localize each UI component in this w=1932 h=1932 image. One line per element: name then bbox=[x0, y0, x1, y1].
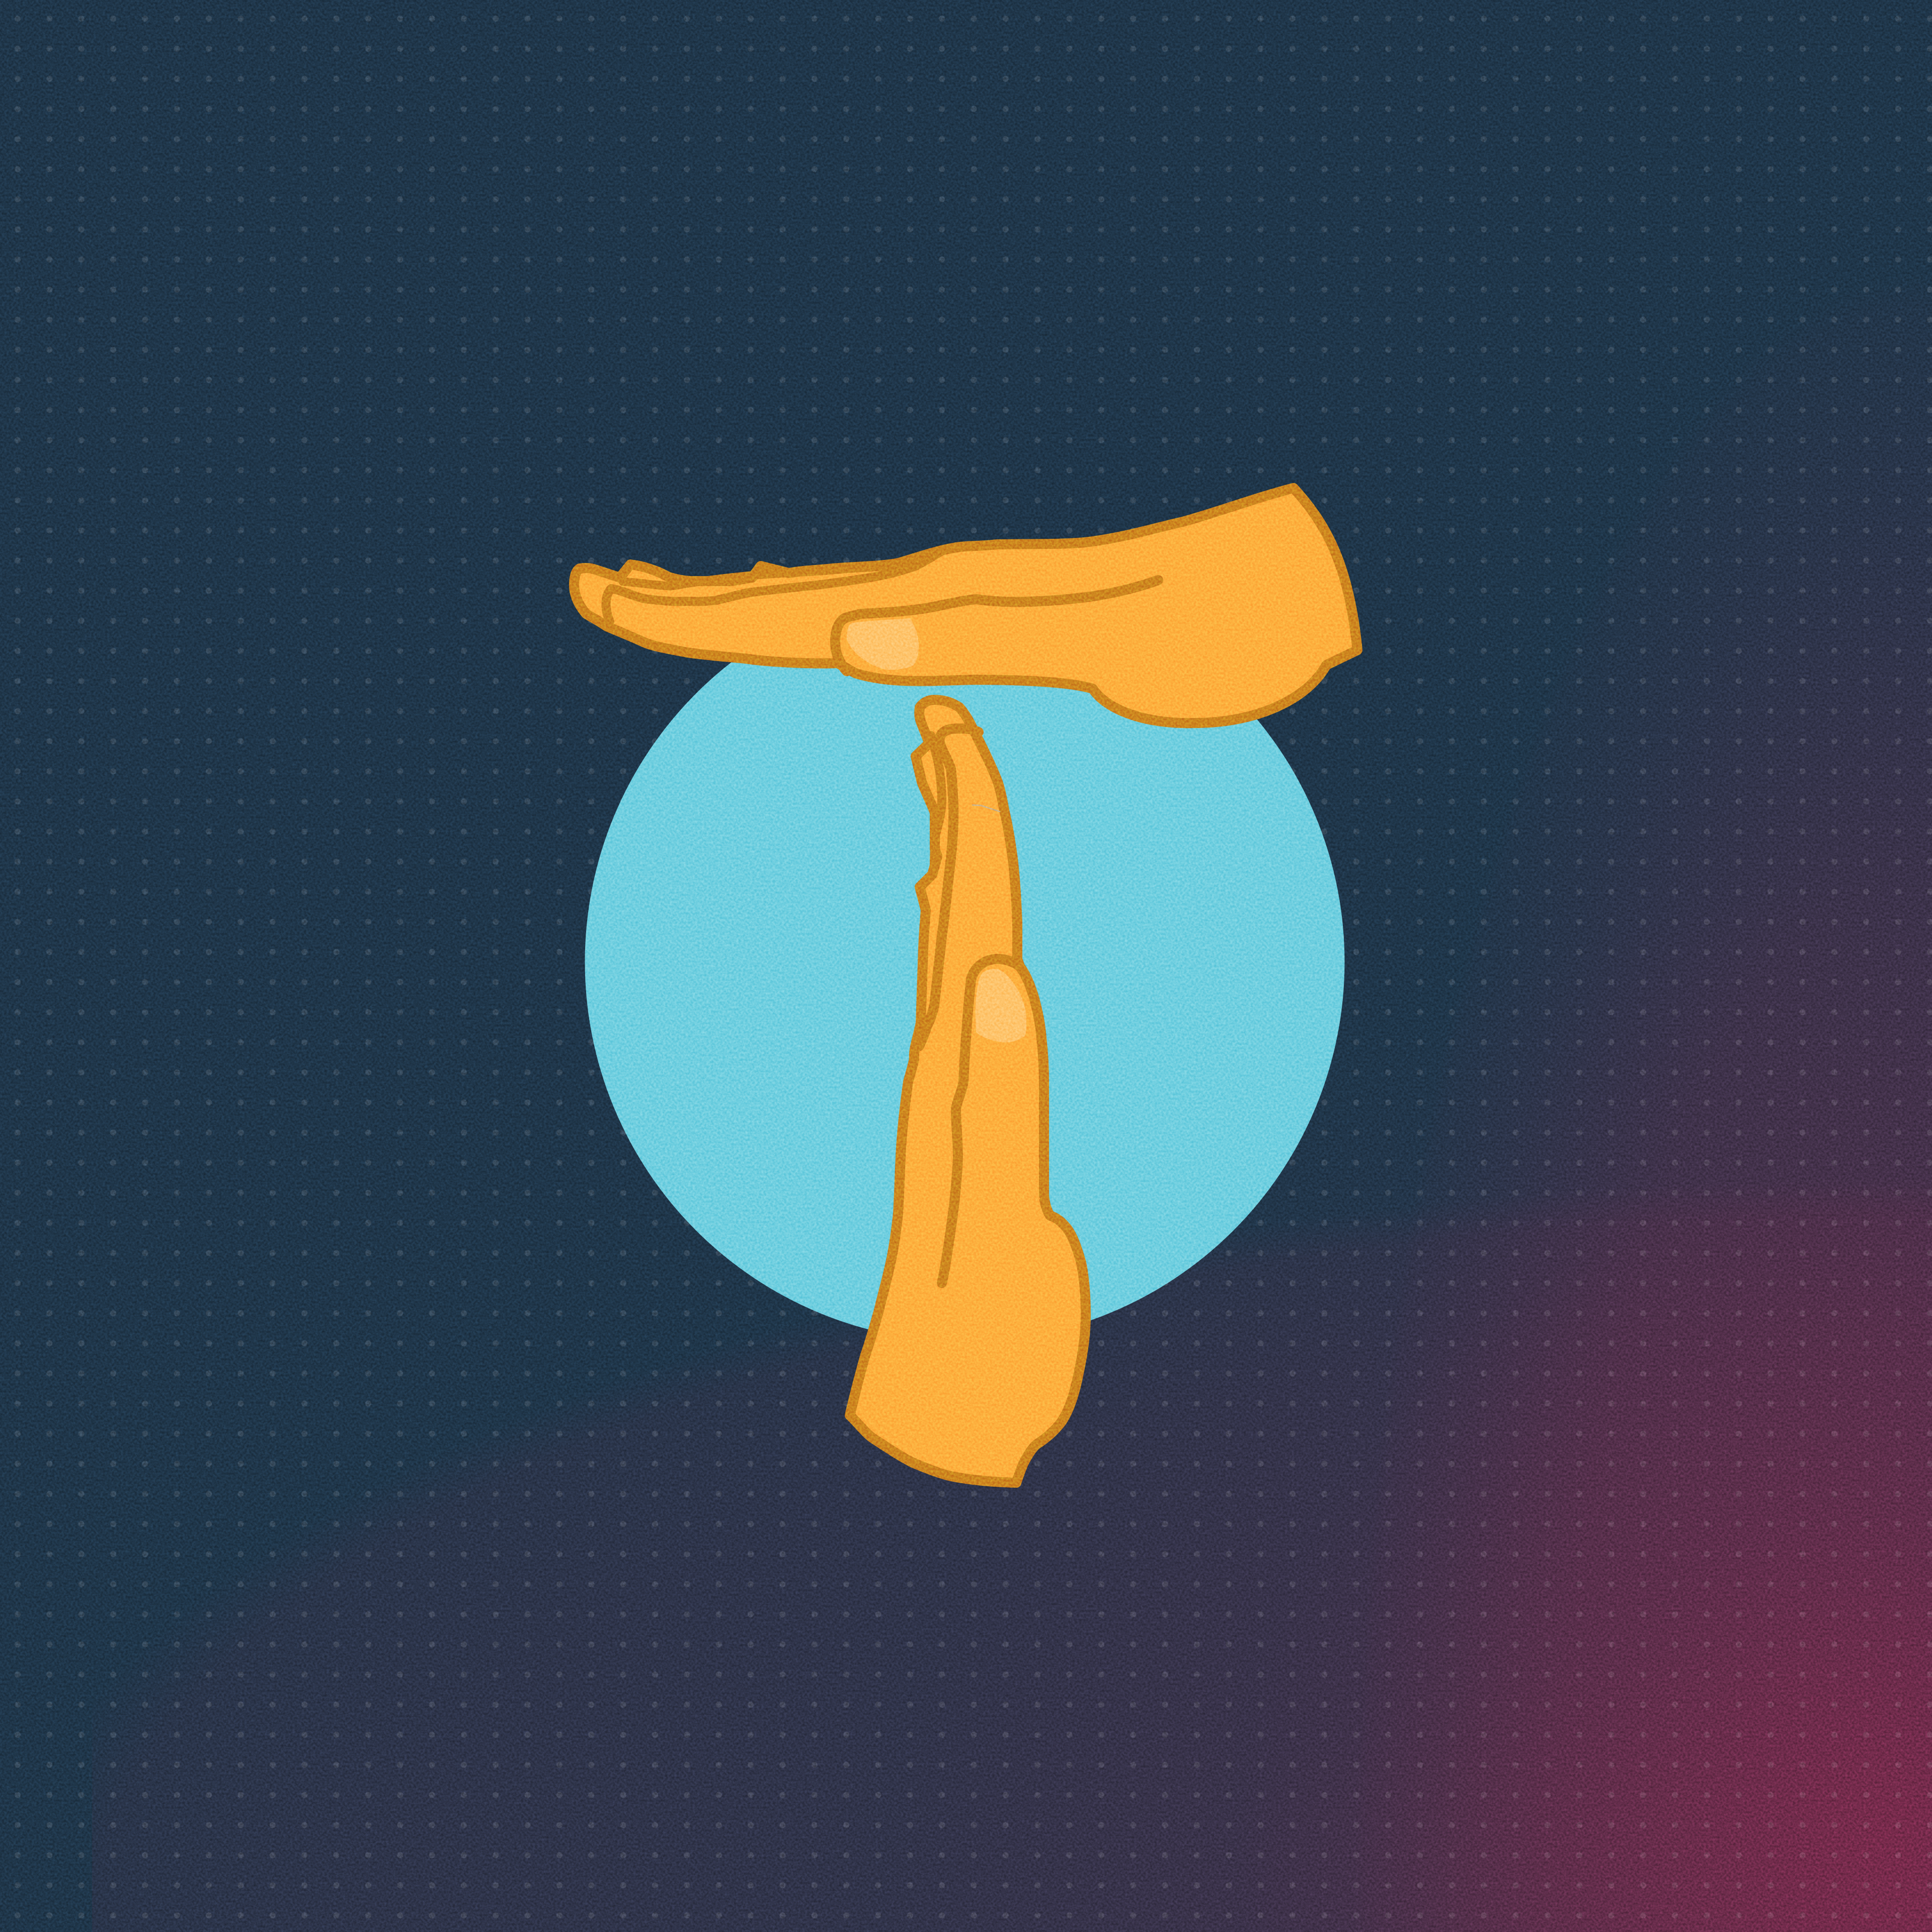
bottom hand back finger line bbox=[931, 736, 942, 864]
bottom hand silhouette bbox=[850, 700, 1086, 1483]
bottom hand thumbnail bbox=[976, 969, 1026, 1042]
top hand back finger line bbox=[623, 565, 904, 586]
top hand thumb line bbox=[835, 580, 1158, 671]
top hand silhouette bbox=[574, 488, 1357, 723]
bottom hand thumb line bbox=[942, 959, 1044, 1283]
bottom hand front finger line bbox=[919, 729, 979, 1046]
blue circle bbox=[585, 582, 1344, 1342]
bottom hand faint scratch bbox=[973, 805, 1000, 812]
icon: top horizontal hand bbox=[574, 488, 1357, 723]
top hand front finger line bbox=[606, 551, 942, 621]
top hand thumbnail bbox=[847, 618, 919, 670]
icon: bottom vertical hand bbox=[850, 700, 1086, 1483]
